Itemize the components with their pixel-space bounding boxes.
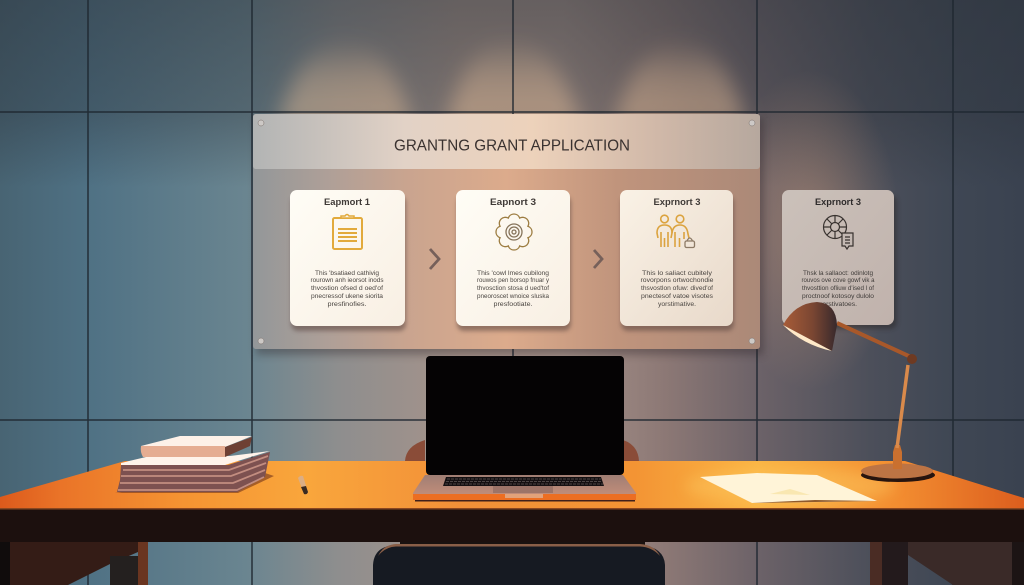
card 3 body: rovorpons ortwochondie [640, 277, 714, 284]
card 1 heading: Eapmort 1 [324, 197, 371, 208]
card 2 body: This 'cowl lmes cubilong [477, 270, 550, 277]
desk legs [0, 541, 1024, 585]
card 3 body: This lo saliact cubitely [642, 270, 713, 277]
card 2 body: rouwos pen borsop fnuar y [477, 277, 550, 284]
card 1 body [310, 270, 384, 308]
title: GRANTNG GRANT APPLICATION [394, 138, 630, 154]
laptop [413, 356, 636, 502]
card 4 heading: Exprnort 3 [815, 197, 861, 208]
stack of books [115, 436, 274, 493]
desk lamp [783, 302, 935, 482]
card 1 [290, 190, 406, 331]
arrow 1 [430, 249, 439, 269]
icon: two people with lock [657, 215, 694, 248]
card 4 body: rouvos ove cove gowf vik a [802, 277, 875, 284]
card 3 body: yorstimative. [658, 301, 696, 308]
pen [298, 476, 308, 494]
icon: gear [496, 214, 532, 250]
card 4 body: proctnoof kotosoy dulolo [802, 293, 875, 300]
card 1 body: pnecressof ukene siorita [311, 293, 384, 300]
chair [373, 544, 665, 585]
card 2 [456, 190, 571, 331]
card 4 body: thvosttion ofliuw d'ised l of [802, 285, 874, 292]
paper document [700, 473, 877, 503]
screws [258, 120, 755, 344]
card 3 body: pnectesof vatoe visotes [641, 293, 713, 300]
card 2 body: thvosction stosa d ued'tof [477, 285, 549, 292]
card 1 body: thvostion ofsed d oed'of [311, 285, 383, 292]
icon: clipboard [333, 214, 362, 249]
card 2 heading: Eapnort 3 [490, 197, 536, 208]
title band [253, 114, 760, 169]
card 4 body [802, 270, 875, 308]
card 3 body: thsvostlon ofuw: dived'of [641, 285, 713, 292]
chair backrest behind laptop [405, 440, 639, 461]
card 3 heading: Exprnort 3 [654, 197, 700, 208]
card 1 body: rourown anh ieorsot inods [310, 277, 384, 284]
card 3 body [640, 270, 714, 308]
card 4 body: Thsk la sallaoct: odinlotg [803, 270, 874, 277]
icon: globe with document [824, 216, 853, 249]
panel: glass board [253, 114, 764, 355]
card 2 body: presfootiate. [494, 301, 533, 308]
card 1 body: presfinofies. [328, 301, 367, 308]
arrow 2 [594, 250, 602, 268]
card 3 [620, 190, 734, 331]
desk [0, 461, 1024, 542]
card 2 body: pneoroscet wnoice sluska [477, 293, 549, 300]
card 4 body: yorstivatoes. [819, 301, 857, 308]
card 1 body: This 'bsatiaed cathivig [315, 270, 380, 277]
card 4 [782, 190, 897, 329]
card 2 body [477, 270, 550, 308]
